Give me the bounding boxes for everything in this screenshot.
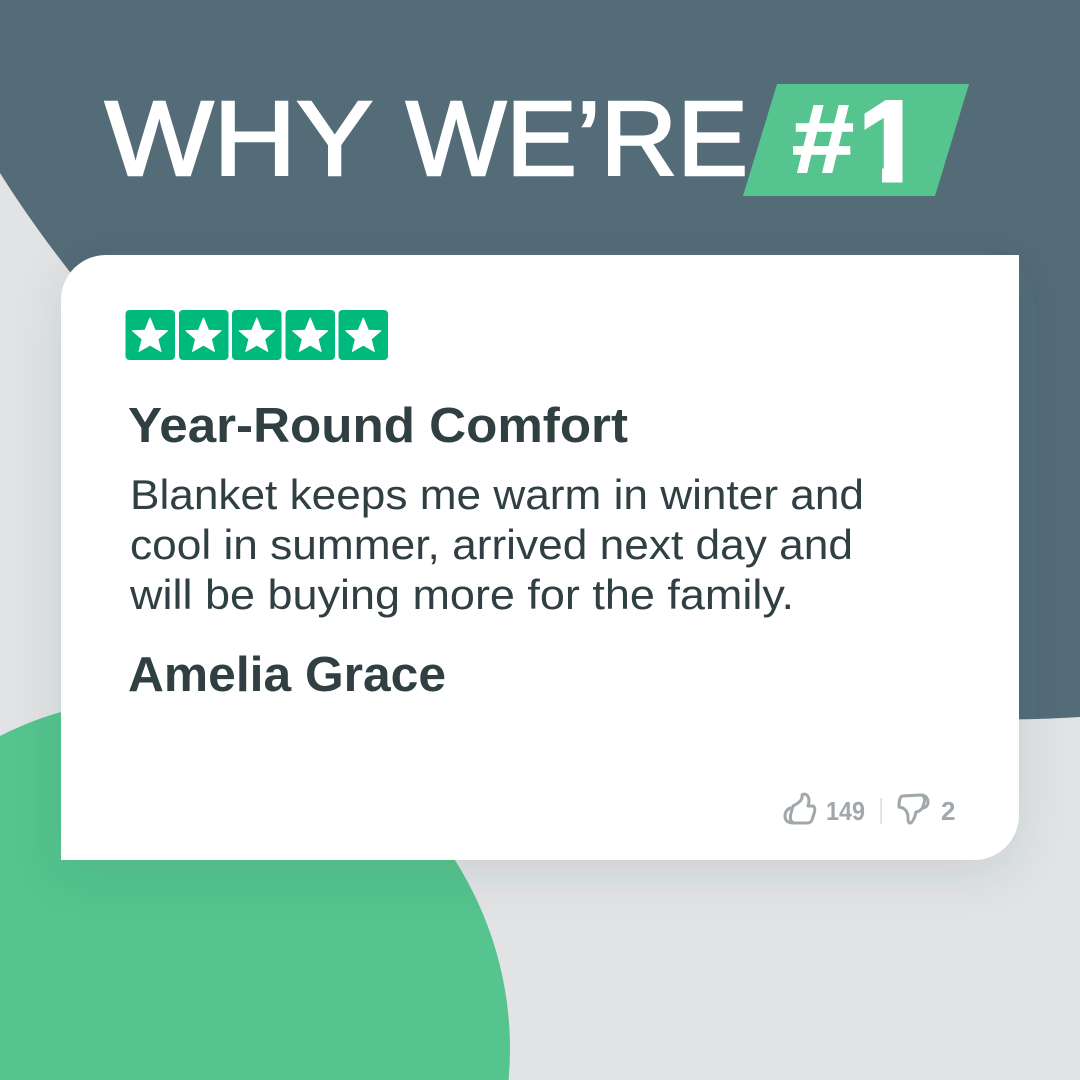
numeral one: 1 xyxy=(858,76,923,207)
review heading: Year-Round Comfort xyxy=(128,399,628,453)
helpful votes xyxy=(785,794,956,826)
green circle xyxy=(0,698,510,1080)
downvote count: 2 xyxy=(941,796,956,826)
review body text xyxy=(129,471,864,618)
upvote count: 149 xyxy=(826,796,865,826)
icon: thumbs down xyxy=(899,795,928,823)
reviewer name: Amelia Grace xyxy=(128,648,446,702)
review body text: will be buying more for the family. xyxy=(129,571,794,618)
title xyxy=(105,80,748,198)
card panel xyxy=(61,255,1019,860)
badge parallelogram xyxy=(743,84,969,196)
title text: we're: WE’RE xyxy=(406,80,748,198)
number one badge xyxy=(743,84,969,196)
title text: why: WHY xyxy=(105,80,373,198)
dark header shape xyxy=(0,0,1080,719)
five star rating xyxy=(126,310,388,360)
review card xyxy=(61,255,1019,860)
hash symbol: # xyxy=(792,84,854,193)
icon: thumbs up xyxy=(785,794,815,823)
review body text: Blanket keeps me warm in winter and xyxy=(130,471,864,518)
review body text: cool in summer, arrived next day and xyxy=(130,521,853,568)
